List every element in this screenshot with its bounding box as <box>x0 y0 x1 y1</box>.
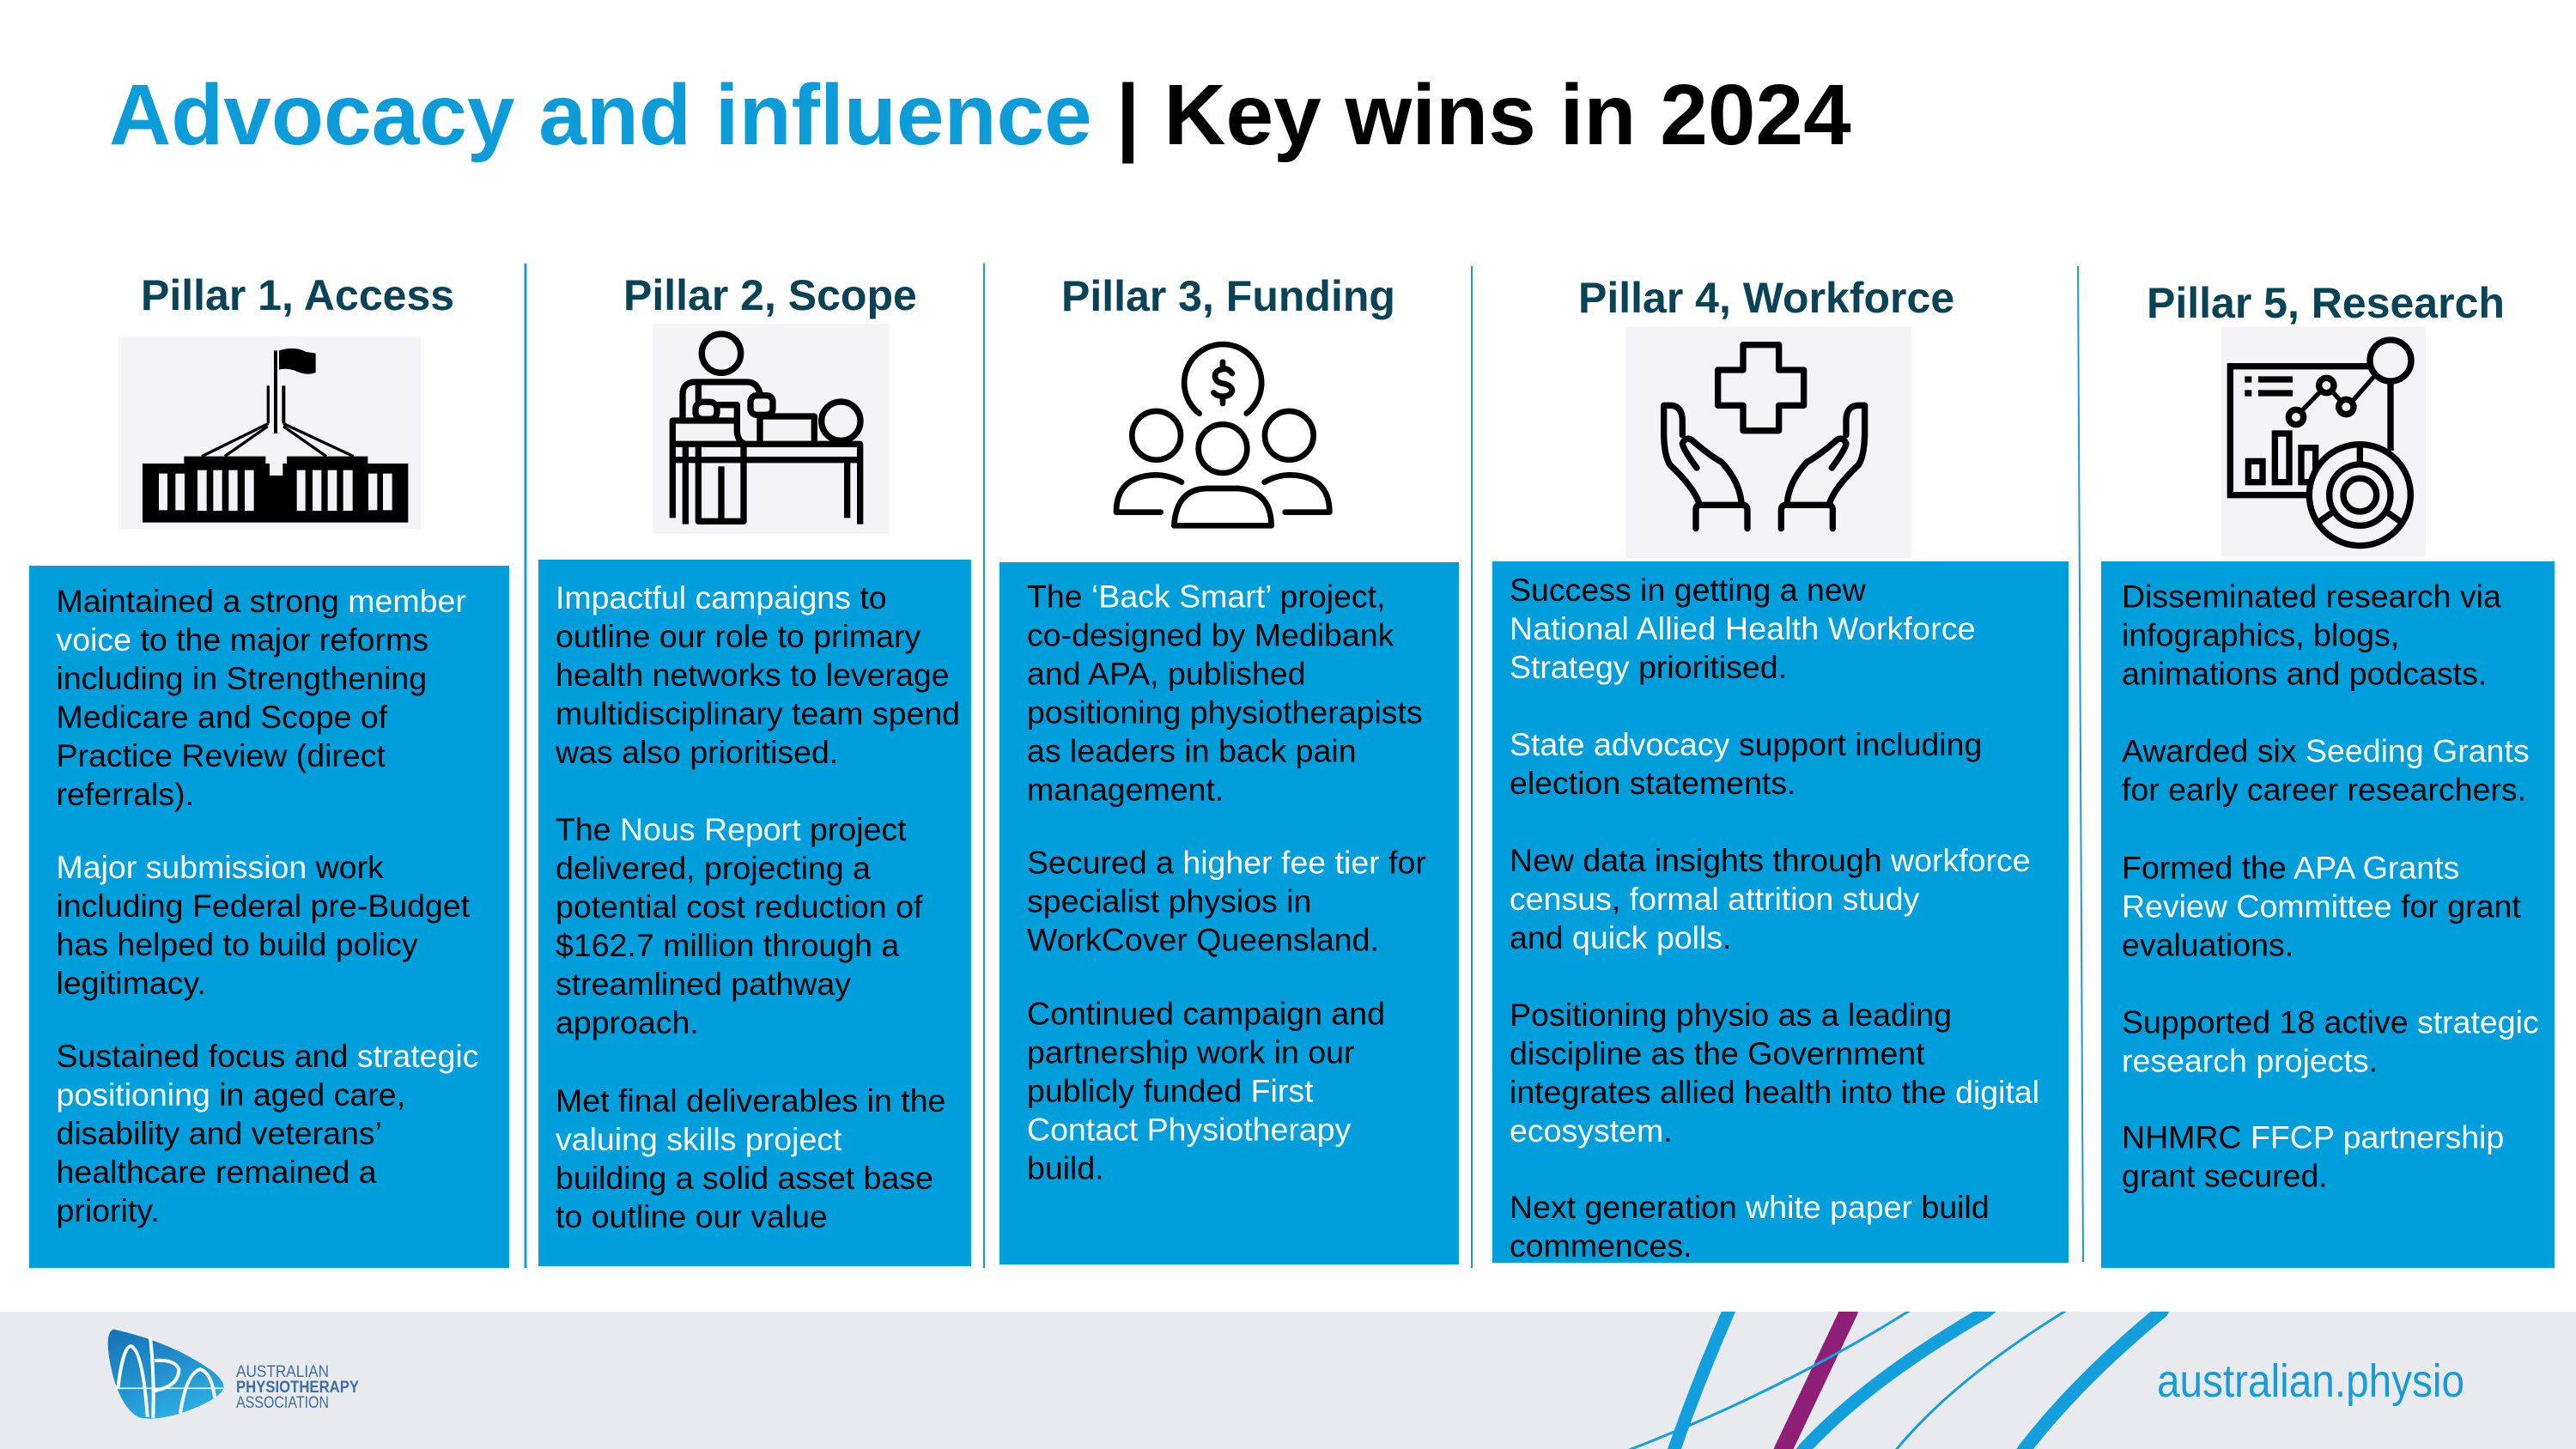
body text: pillar 4: census, formal attrition study <box>1510 881 1920 917</box>
panel: pillar 2 scope <box>538 271 971 1266</box>
body text: pillar 1: Practice Review (direct <box>57 737 386 773</box>
body text: pillar 3: and APA, published <box>1027 656 1306 692</box>
heading: pillar 3: Pillar 3, Funding <box>1061 272 1395 320</box>
body text: pillar 5: evaluations. <box>2122 927 2293 963</box>
body text: pillar 5: animations and podcasts. <box>2122 656 2487 692</box>
body text: pillar 4: election statements. <box>1510 765 1796 801</box>
body text: pillar 3: The ‘Back Smart’ project, <box>1027 579 1386 615</box>
panel: pillar 5 research <box>2101 279 2555 1268</box>
body text: pillar 3: WorkCover Queensland. <box>1027 922 1379 958</box>
title: Advocacy and influence | Key wins in 2024 <box>109 67 1851 164</box>
body text: pillar 4: Success in getting a new <box>1510 572 1867 608</box>
footer band <box>0 1298 2576 1449</box>
body text: pillar 2: outline our role to primary <box>556 618 920 654</box>
body text: pillar 1: Maintained a strong member <box>57 583 466 619</box>
body text: pillar 1: including Federal pre-Budget <box>57 888 471 924</box>
body text: pillar 1: legitimacy. <box>57 965 206 1001</box>
body text: pillar 2: multidisciplinary team spend <box>556 695 960 731</box>
body text: pillar 3: co-designed by Medibank <box>1027 616 1394 652</box>
body text: pillar 5 <box>2122 579 2539 1193</box>
body text: pillar 2: Met final deliverables in the <box>556 1082 945 1119</box>
body text: pillar 5: Review Committee for grant <box>2122 888 2521 924</box>
body text: pillar 2: was also prioritised. <box>555 734 838 770</box>
heading: pillar 4: Pillar 4, Workforce <box>1578 274 1954 322</box>
text box: pillar 4 <box>1492 561 2069 1263</box>
body text: pillar 3: management. <box>1027 771 1224 807</box>
body text: pillar 1: Medicare and Scope of <box>57 699 388 735</box>
logo wordmark <box>236 1363 359 1412</box>
body text: pillar 4: Next generation white paper build <box>1510 1189 1990 1225</box>
body text: pillar 1: voice to the major reforms <box>57 621 428 658</box>
body text: pillar 4: Strategy prioritised. <box>1510 649 1787 685</box>
body text: pillar 2: $162.7 million through a <box>556 927 899 963</box>
body text: pillar 4: National Allied Health Workforce <box>1510 610 1976 646</box>
logo wordmark: PHYSIOTHERAPY <box>236 1379 359 1397</box>
body text: pillar 3: as leaders in back pain <box>1027 733 1357 769</box>
body text: pillar 1 <box>57 583 478 1228</box>
body text: pillar 3: publicly funded First <box>1027 1073 1314 1109</box>
body text: pillar 1: referrals). <box>57 776 194 812</box>
heading: pillar 1: Pillar 1, Access <box>141 271 454 319</box>
body text: pillar 2: streamlined pathway <box>556 966 851 1002</box>
body text: pillar 2: delivered, projecting a <box>556 850 871 886</box>
text box: pillar 2 <box>538 560 971 1266</box>
body text: pillar 1: priority. <box>57 1192 160 1228</box>
body text: pillar 5: Formed the APA Grants <box>2122 850 2459 886</box>
text box: pillar 5 <box>2101 561 2555 1268</box>
logo wordmark: ASSOCIATION <box>236 1394 329 1412</box>
panel: pillar 3 funding <box>999 272 1459 1264</box>
body text: pillar 4: State advocacy support including <box>1510 726 1982 762</box>
body text: pillar 2: Impactful campaigns to <box>556 579 887 615</box>
website url: australian.physio <box>2157 1355 2464 1407</box>
icon: hands holding medical cross <box>1625 327 1911 558</box>
heading: pillar 5: Pillar 5, Research <box>2147 279 2505 327</box>
panel: pillar 1 access <box>29 271 509 1268</box>
body text: pillar 2: valuing skills project <box>556 1121 842 1157</box>
body text: pillar 4: ecosystem. <box>1510 1113 1673 1149</box>
body text: pillar 1: positioning in aged care, <box>57 1076 405 1113</box>
body text: pillar 2: approach. <box>556 1004 699 1040</box>
body text: pillar 4 <box>1510 572 2039 1264</box>
body text: pillar 4: integrates allied health into the digital <box>1510 1074 2039 1110</box>
body text: pillar 4: New data insights through workforce <box>1510 842 2031 878</box>
body text: pillar 3: build. <box>1027 1150 1104 1186</box>
icon: parliament house <box>118 336 421 530</box>
body text: pillar 1: Major submission work <box>57 849 384 885</box>
icon: research charts <box>2221 327 2426 556</box>
logo: APA mark and wordmark <box>108 1329 359 1419</box>
body text: pillar 3: Secured a higher fee tier for <box>1027 845 1426 881</box>
body text: pillar 5: NHMRC FFCP partnership <box>2122 1119 2504 1155</box>
body text: pillar 5: Disseminated research via <box>2122 579 2501 615</box>
heading: pillar 2: Pillar 2, Scope <box>623 271 917 319</box>
text box: pillar 3 <box>999 562 1459 1264</box>
body text: pillar 3: specialist physios in <box>1027 882 1311 919</box>
body text: pillar 3: partnership work in our <box>1027 1034 1354 1070</box>
body text: pillar 2: health networks to leverage <box>556 657 950 693</box>
icon: people and dollar coin <box>1116 344 1329 525</box>
body text: pillar 1: has helped to build policy <box>57 926 418 962</box>
logo wordmark: AUSTRALIAN <box>236 1363 329 1381</box>
body text: pillar 2: potential cost reduction of <box>556 888 923 925</box>
body text: pillar 5: Awarded six Seeding Grants <box>2122 733 2530 769</box>
body text: pillar 1: including in Strengthening <box>57 660 427 696</box>
icon: physiotherapist and patient <box>653 324 889 534</box>
body text: pillar 5: infographics, blogs, <box>2122 616 2399 652</box>
body text: pillar 1: Sustained focus and strategic <box>57 1038 478 1074</box>
panel: pillar 4 workforce <box>1492 274 2069 1264</box>
body text: pillar 2: building a solid asset base <box>556 1160 933 1196</box>
body text: pillar 1: healthcare remained a <box>57 1154 377 1190</box>
body text: pillar 4: and quick polls. <box>1510 919 1732 955</box>
body text: pillar 3: positioning physiotherapists <box>1027 694 1423 730</box>
body text: pillar 3 <box>1027 579 1426 1186</box>
body text: pillar 4: discipline as the Government <box>1510 1035 1925 1071</box>
footer swooshes <box>1628 1312 2169 1449</box>
logo mark <box>108 1329 224 1419</box>
body text: pillar 1: disability and veterans’ <box>57 1115 382 1151</box>
body text: pillar 2 <box>555 579 960 1234</box>
body text: pillar 4: Positioning physio as a leading <box>1510 997 1952 1033</box>
body text: pillar 3: Continued campaign and <box>1027 996 1385 1032</box>
text box: pillar 1 <box>29 566 509 1268</box>
body text: pillar 5: for early career researchers. <box>2122 771 2526 807</box>
body text: pillar 2: The Nous Report project <box>556 811 907 847</box>
body text: pillar 5: Supported 18 active strategic <box>2122 1004 2539 1040</box>
body text: pillar 2: to outline our value <box>556 1198 828 1234</box>
body text: pillar 5: grant secured. <box>2122 1157 2328 1193</box>
body text: pillar 3: Contact Physiotherapy <box>1027 1111 1352 1147</box>
body text: pillar 5: research projects. <box>2122 1042 2378 1078</box>
body text: pillar 4: commences. <box>1510 1228 1692 1264</box>
